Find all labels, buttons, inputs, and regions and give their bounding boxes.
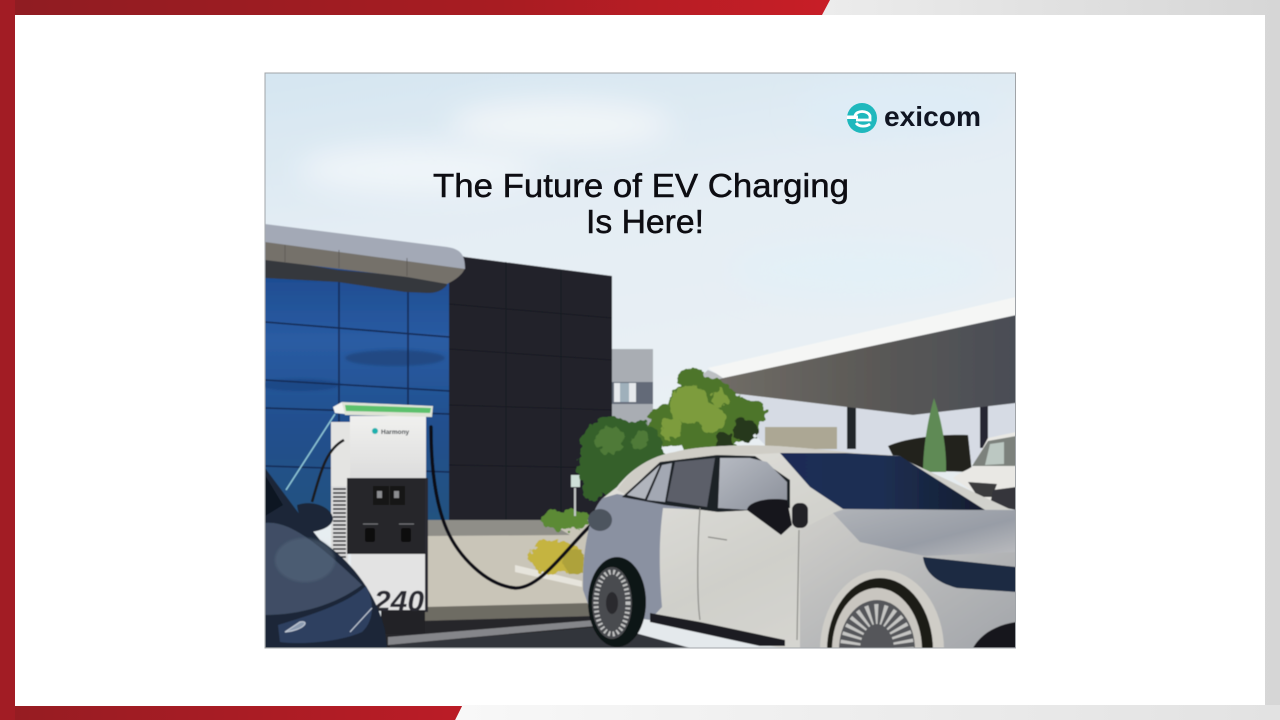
car roof rail [617,445,905,495]
car mirror [747,499,808,535]
sky behind service canopy [736,394,1015,464]
car windscreen [780,453,985,510]
EV charger unit [286,402,433,634]
car window frame [622,455,790,512]
title [433,168,849,241]
car bonnet [833,509,1016,556]
building: curved roof canopy [265,224,465,293]
charger white upper body [350,416,426,480]
charger logo: Harmony [381,429,410,436]
car sill [650,613,785,646]
photo border [265,73,1016,648]
car door lines and handle [698,508,799,640]
service canopy pillars [846,406,988,450]
logo icon [847,103,877,133]
left car mirror [297,503,333,532]
sky [255,63,1026,658]
foreground left car [265,468,387,648]
car front side window [718,458,787,510]
tree: right [648,368,766,463]
charger number: 240 [373,586,424,618]
cypress tree [923,398,946,472]
panel: photo of EV charging station [266,74,1015,648]
title: Is Here! [586,204,704,241]
pavement and kerb [385,520,690,648]
beige distant building [765,427,837,449]
parked vehicle: white van [953,432,1016,510]
rear wheel [588,557,646,647]
building: blue glass facade [260,262,449,525]
charger base [380,609,426,630]
logo: exicom [847,101,981,133]
charger screens [373,486,405,505]
left charger cables [286,414,344,502]
charger side panel [331,422,350,486]
left car headlight [278,586,372,643]
trees [576,368,766,500]
car body outline [583,445,1016,648]
charger sockets [363,524,414,542]
charge port flap [588,509,612,531]
charger top cap with green light [333,402,433,417]
car rear side windows [627,458,715,507]
title: The Future of EV Charging [433,168,849,205]
shrubs [529,510,590,574]
logo wordmark: exicom [884,101,981,132]
tree: left [576,418,670,500]
foreground silver car [582,444,1015,648]
car rear shaded section [583,494,707,620]
car front fender and door [800,507,1016,648]
charger logo [372,428,410,436]
building: small rear block [612,349,653,429]
charger white lower body [351,554,425,610]
charger dark panel [347,478,427,554]
building: dark cladding block [449,252,612,522]
car front lower bumper [973,622,1016,648]
charger cable to car [431,427,592,588]
charger side slats [331,484,348,564]
parked vehicle: dark [888,435,972,472]
charger dark right edge [425,478,428,612]
sign post [571,475,580,516]
car headlight [923,557,1016,592]
front wheel [820,570,944,720]
service canopy roof [688,297,1016,415]
